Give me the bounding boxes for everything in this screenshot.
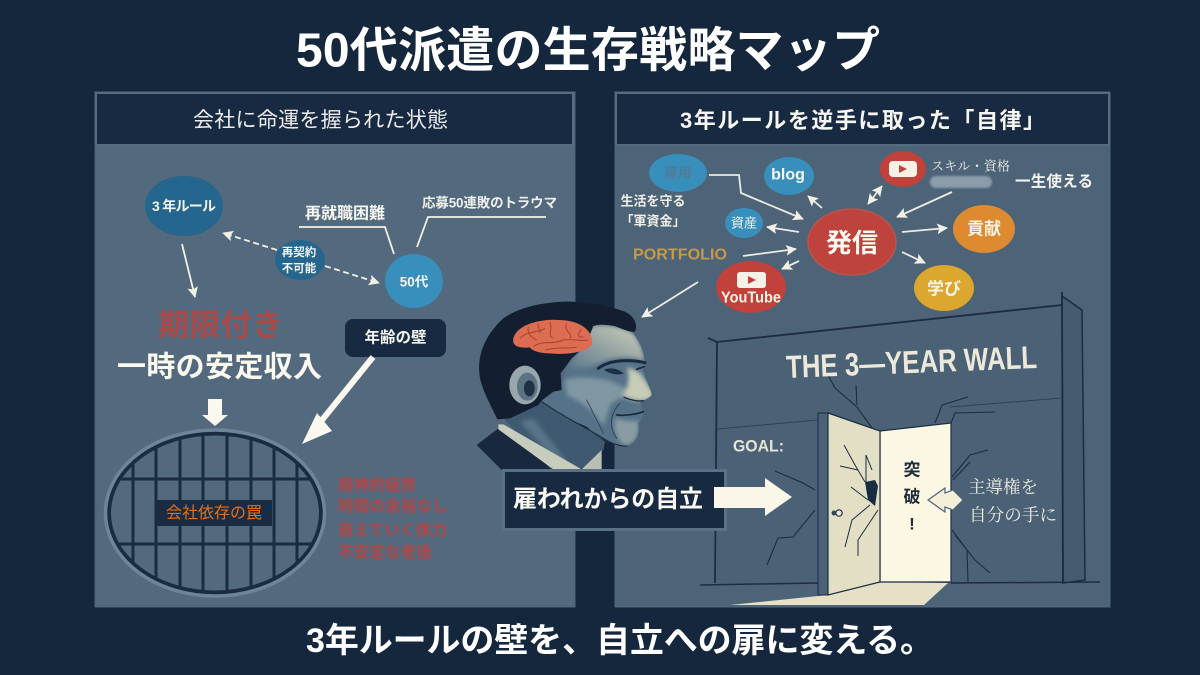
node: blog: blog bbox=[771, 166, 805, 184]
hair bbox=[479, 302, 636, 419]
panel: right autonomy bbox=[616, 92, 1110, 606]
label: company dependence trap bbox=[156, 500, 272, 526]
label: goal: GOAL: bbox=[733, 436, 784, 456]
text: war chest: 「軍資金」 bbox=[620, 214, 686, 228]
label: portfolio: PORTFOLIO bbox=[633, 246, 727, 264]
text list: risks: 不安定な老後 bbox=[338, 542, 432, 562]
callout: application trauma: 応募50連敗のトラウマ bbox=[422, 194, 557, 210]
infographic canvas bbox=[94, 26, 1110, 656]
node: renewal impossible bbox=[275, 240, 325, 280]
text: lifelong use: 一生使える bbox=[1015, 172, 1093, 190]
label: age wall: 年齢の壁 bbox=[364, 328, 427, 346]
suit bbox=[477, 428, 583, 472]
arrow: autonomy toward door bbox=[928, 488, 963, 512]
text: take the initiative: 主導権を bbox=[968, 477, 1038, 497]
right panel heading bbox=[616, 93, 1109, 145]
node: youtube bbox=[716, 261, 786, 313]
arrow: rule to time limit bbox=[182, 244, 195, 297]
node: blog bbox=[764, 157, 814, 195]
node: contribution: 貢献 bbox=[967, 218, 1001, 238]
node: renewal impossible: 再契約 bbox=[282, 245, 316, 259]
text list: risks bbox=[338, 476, 448, 562]
text: take the initiative: 自分の手に bbox=[969, 505, 1057, 525]
illustration: open door bbox=[730, 413, 951, 605]
shirt collar right bbox=[582, 450, 602, 469]
right panel heading: 3年ルールを逆手に取った「自律」 bbox=[680, 108, 1045, 133]
callout: re-employment difficulty: 再就職困難 bbox=[305, 204, 385, 222]
ear bbox=[509, 366, 541, 404]
arrow: income down to trap bbox=[202, 399, 228, 426]
text: skills and qualifications: スキル・資格 bbox=[931, 158, 1010, 174]
label: company dependence trap: 会社依存の罠 bbox=[166, 504, 262, 522]
brain bbox=[513, 320, 592, 354]
label: age wall bbox=[345, 319, 446, 357]
text: war chest bbox=[620, 194, 686, 228]
text: the 3-year wall: THE 3—YEAR WALL bbox=[785, 339, 1038, 385]
text: temporary stable income: 一時の安定収入 bbox=[117, 350, 322, 384]
hub arrows bbox=[642, 175, 952, 317]
node: output hub bbox=[808, 209, 896, 275]
text: breakthrough bbox=[904, 460, 920, 534]
diagram: output hub bbox=[620, 151, 1093, 317]
text: time limited: 期限付き bbox=[158, 308, 283, 343]
title: 50代派遣の生存戦略マップ bbox=[296, 24, 880, 78]
callout: re-employment difficulty bbox=[299, 204, 394, 254]
node: learning bbox=[914, 265, 974, 311]
text: breakthrough: 破 bbox=[904, 488, 920, 506]
dashed arrow: contract renewal impossible bbox=[223, 233, 379, 283]
face highlights bbox=[565, 326, 653, 445]
node: assets bbox=[725, 208, 763, 238]
text: breakthrough: ! bbox=[909, 514, 915, 534]
text list: risks: 衰えていく体力 bbox=[338, 522, 447, 540]
node: 3-year rule: 3 年ルール bbox=[152, 198, 216, 214]
arrow: age wall to trap bbox=[302, 357, 373, 444]
shirt collar bbox=[498, 424, 582, 469]
node: employment bbox=[649, 154, 707, 192]
node: renewal impossible: 不可能 bbox=[282, 261, 317, 275]
wall cracks bbox=[767, 375, 995, 582]
neck shading bbox=[520, 418, 567, 462]
left panel heading bbox=[96, 93, 573, 145]
node: output hub: 発信 bbox=[826, 228, 878, 258]
node: youtube: YouTube bbox=[721, 290, 781, 306]
text: take the initiative bbox=[968, 477, 1057, 525]
callout: independence from employment bbox=[504, 470, 726, 530]
text: war chest: 生活を守る bbox=[620, 194, 686, 208]
node: contribution bbox=[953, 205, 1015, 253]
node: learning: 学び bbox=[927, 278, 961, 298]
illustration: the 3-year wall bbox=[700, 292, 1100, 605]
callout: independence from employment: 雇われからの自立 bbox=[513, 486, 703, 513]
neck bbox=[503, 402, 605, 468]
arrow: toward the door bbox=[714, 478, 792, 516]
icon: cage trap bbox=[100, 425, 330, 600]
text: skills and qualifications bbox=[930, 158, 1010, 188]
callout: application trauma bbox=[417, 194, 557, 247]
text: breakthrough: 突 bbox=[904, 460, 920, 480]
node: employment: 雇用 bbox=[664, 166, 692, 180]
node: youtube icon bbox=[880, 151, 926, 187]
left panel heading: 会社に命運を握られた状態 bbox=[193, 109, 448, 132]
text list: risks: 時間の余裕なし bbox=[338, 498, 448, 516]
node: 3-year rule bbox=[145, 176, 223, 236]
panel: left company dependence bbox=[96, 92, 574, 606]
facial features bbox=[542, 361, 645, 446]
node: fifties: 50代 bbox=[400, 274, 429, 290]
face bbox=[542, 325, 652, 446]
footer message: 3年ルールの壁を、自立への扉に変える。 bbox=[306, 622, 934, 660]
node: assets: 資産 bbox=[731, 216, 757, 230]
node: fifties bbox=[385, 254, 443, 308]
text list: risks: 精神的疲弊 bbox=[338, 476, 417, 494]
illustration: man profile with brain bbox=[477, 302, 653, 472]
